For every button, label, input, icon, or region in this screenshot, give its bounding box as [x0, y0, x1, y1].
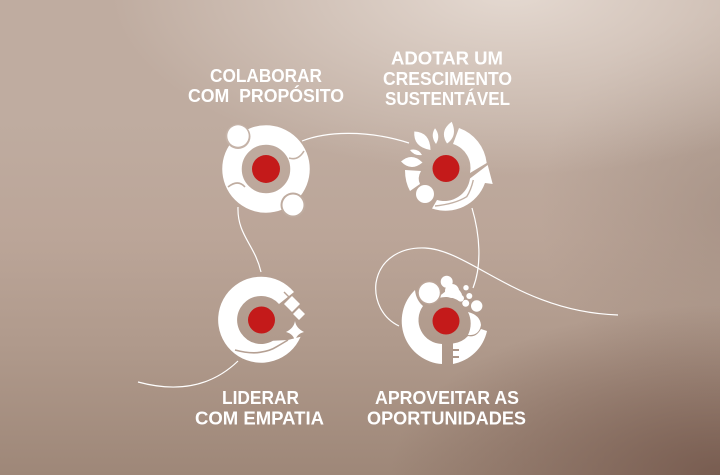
title: aproveitar as oportunidades: OPORTUNIDADES	[367, 408, 526, 428]
title: liderar com empatia	[195, 387, 324, 428]
icon: key and opportunity bubbles	[402, 276, 487, 364]
title: adotar um crescimento sustentável	[383, 48, 512, 109]
title: adotar um crescimento sustentável: ADOTAR UM	[391, 48, 503, 68]
title: colaborar com propósito	[188, 65, 344, 106]
title: aproveitar as oportunidades: APROVEITAR AS	[375, 387, 519, 408]
title: colaborar com propósito: COM PROPÓSITO	[188, 85, 344, 106]
connector: colaborar to liderar	[238, 207, 261, 272]
icon: growth arrow and leaves	[401, 122, 493, 211]
connector: aproveitar sweeping curve	[376, 248, 618, 326]
icon: hand and sparkles	[218, 277, 305, 363]
title: colaborar com propósito: COLABORAR	[210, 65, 322, 86]
connector: colaborar to adotar	[302, 133, 409, 143]
title: aproveitar as oportunidades	[367, 387, 526, 428]
connector: adotar to aproveitar	[472, 208, 479, 288]
title: adotar um crescimento sustentável: CRESCIMENTO	[383, 68, 512, 89]
title: liderar com empatia: LIDERAR	[222, 387, 299, 408]
title: adotar um crescimento sustentável: SUSTENTÁVEL	[385, 88, 510, 109]
title: liderar com empatia: COM EMPATIA	[195, 408, 324, 428]
icon: collaboration ring	[226, 124, 306, 218]
connector: liderar tail	[138, 361, 238, 387]
